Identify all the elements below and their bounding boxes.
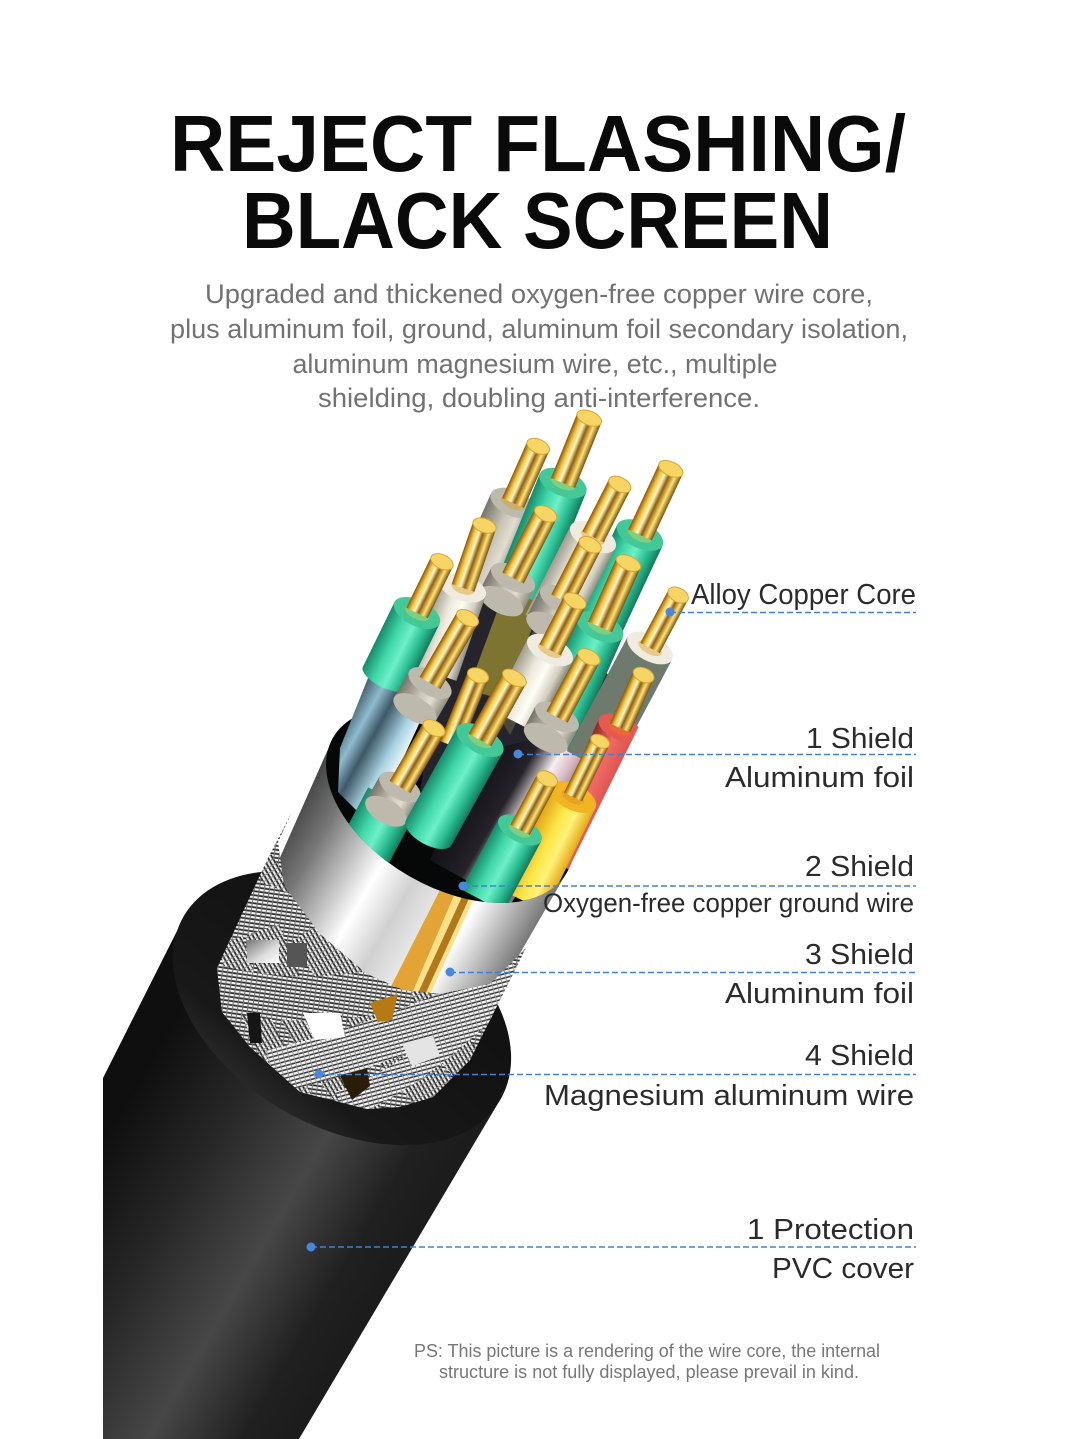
label: shield 4 bbox=[544, 1040, 914, 1112]
footnote: structure is not fully displayed, please prevail in kind. bbox=[439, 1362, 859, 1382]
wire: red bbox=[566, 666, 654, 870]
wire: green bbox=[504, 410, 602, 600]
label: shield 1 bbox=[725, 723, 914, 794]
leader dots bbox=[306, 608, 674, 1252]
subtitle text: aluminum magnesium wire, etc., multiple bbox=[292, 349, 778, 379]
inner conductor opening bbox=[292, 666, 608, 944]
braid windows bbox=[247, 1013, 262, 1043]
cable illustration bbox=[103, 402, 704, 1439]
label: shield 2 bbox=[543, 851, 914, 918]
wire: yellow bbox=[512, 734, 610, 901]
wire: bright green front bbox=[405, 668, 527, 850]
wire: green bottom bbox=[463, 770, 558, 903]
wire: cream bbox=[525, 476, 632, 616]
label: shield 2: 2 Shield bbox=[805, 851, 914, 883]
title: REJECT FLASHING/ bbox=[170, 99, 906, 188]
title: BLACK SCREEN bbox=[242, 176, 833, 265]
wire: white right bbox=[567, 586, 689, 758]
wire: grey bbox=[455, 438, 550, 586]
subtitle text: plus aluminum foil, ground, aluminum foil secondary isolation, bbox=[170, 314, 908, 344]
central foil core bbox=[420, 602, 608, 792]
wire: green right bbox=[582, 460, 684, 632]
label: shield 1: 1 Shield bbox=[806, 723, 914, 755]
label: protection: 1 Protection bbox=[747, 1214, 914, 1246]
inner wire bundle bbox=[333, 402, 704, 912]
blue foil bbox=[338, 678, 420, 810]
subtitle text bbox=[170, 279, 908, 413]
wire: translucent grey left bbox=[393, 609, 479, 724]
wire: translucent grey behind centre bbox=[526, 536, 602, 634]
label: shield 1: Aluminum foil bbox=[725, 762, 914, 794]
wire: green left bbox=[362, 553, 454, 692]
wire: translucent grey upper bbox=[482, 505, 558, 616]
wire: cream left bbox=[418, 517, 496, 681]
outer PVC jacket bbox=[103, 925, 497, 1439]
label: alloy copper core: Alloy Copper Core bbox=[691, 579, 916, 611]
label: protection bbox=[747, 1214, 914, 1285]
wire: green middle right bbox=[552, 554, 642, 750]
wire: lower green small bbox=[349, 787, 407, 863]
label: shield 4: Magnesium aluminum wire bbox=[544, 1080, 914, 1112]
title bbox=[170, 99, 906, 265]
wire: translucent grey middle bbox=[524, 648, 600, 754]
subtitle text: Upgraded and thickened oxygen-free copper wire core, bbox=[205, 279, 873, 309]
wire: cream middle bbox=[507, 592, 587, 727]
label: shield 3: Aluminum foil bbox=[725, 978, 914, 1010]
subtitle text: shielding, doubling anti-interference. bbox=[318, 383, 760, 413]
wire: back thin tip bbox=[440, 667, 490, 744]
label: protection: PVC cover bbox=[772, 1253, 914, 1285]
footnote bbox=[414, 1341, 880, 1382]
label: shield 4: 4 Shield bbox=[805, 1040, 914, 1072]
label: shield 3 bbox=[725, 939, 914, 1010]
leader lines bbox=[311, 612, 916, 1247]
ground wire bbox=[378, 877, 476, 1034]
silver foil shield bbox=[278, 738, 567, 1040]
jacket end face ring bbox=[125, 814, 559, 1202]
footnote: PS: This picture is a rendering of the wire core, the internal bbox=[414, 1341, 880, 1361]
wire: translucent grey lower bbox=[365, 719, 446, 827]
label: shield 2: Oxygen-free copper ground wire bbox=[543, 888, 914, 918]
braided magnesium aluminum shield bbox=[217, 814, 526, 1109]
label: shield 3: 3 Shield bbox=[805, 939, 914, 971]
